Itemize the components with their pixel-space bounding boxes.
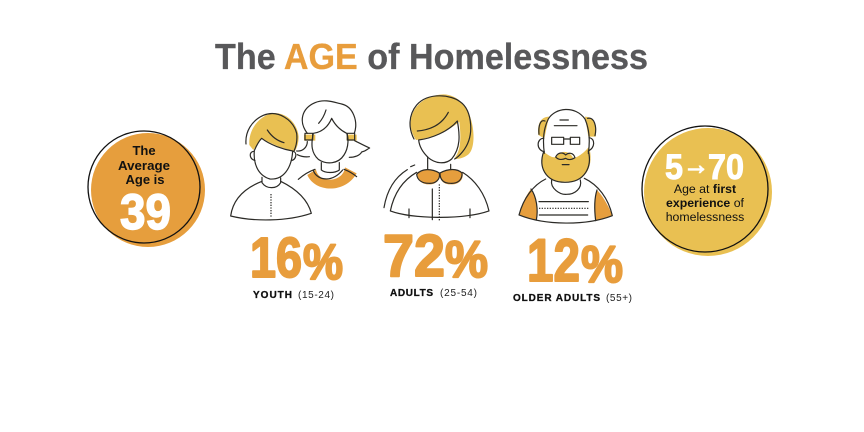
badge: average age: Average <box>118 158 170 173</box>
badge: age range: → <box>683 149 709 180</box>
badge: age range: 5 <box>665 148 683 187</box>
boy outline <box>231 114 311 220</box>
stat: older adults: OLDER ADULTS <box>513 293 600 304</box>
man sleeves <box>519 189 612 221</box>
badge: age range: Age at first <box>674 182 736 196</box>
stat: adults <box>383 223 488 299</box>
stat: adults: % <box>445 231 488 289</box>
badge: average age: The <box>132 143 156 158</box>
stat: older adults: (55+) <box>606 293 632 304</box>
stat: adults: (25-54) <box>440 288 477 299</box>
woman outline <box>384 96 489 222</box>
badge: age range: experience of <box>666 196 745 210</box>
stat: youth: 16 <box>250 226 302 290</box>
badge: average age <box>88 131 205 247</box>
stat: adults: ADULTS <box>390 288 433 299</box>
stat: older adults: % <box>581 236 623 294</box>
stat: older adults: 12 <box>527 227 580 294</box>
stat: older adults <box>513 227 632 304</box>
man beard <box>542 147 591 182</box>
girl outline <box>297 101 370 179</box>
woman hair <box>411 94 474 159</box>
icon: adult woman <box>384 94 489 222</box>
stat: adults: 72 <box>383 223 445 289</box>
title: The AGE of Homelessness <box>215 36 648 77</box>
stat: youth: % <box>303 234 343 290</box>
badge: age range <box>642 126 772 256</box>
girl hair ties <box>304 135 357 141</box>
icon: older man <box>519 109 612 223</box>
badge: age range: 70 <box>708 148 744 187</box>
stat: youth <box>250 226 343 301</box>
girl collar <box>307 167 357 189</box>
icon: youth pair <box>231 101 370 220</box>
badge: age range: homelessness <box>666 210 744 224</box>
man outline <box>519 109 612 223</box>
woman collar <box>417 169 463 184</box>
stat: youth: (15-24) <box>298 290 334 301</box>
man hair <box>538 117 596 138</box>
stat: youth: YOUTH <box>253 290 292 301</box>
boy hair <box>249 113 299 151</box>
badge: average age: Age is <box>125 172 165 187</box>
badge: average age: 39 <box>120 184 171 240</box>
